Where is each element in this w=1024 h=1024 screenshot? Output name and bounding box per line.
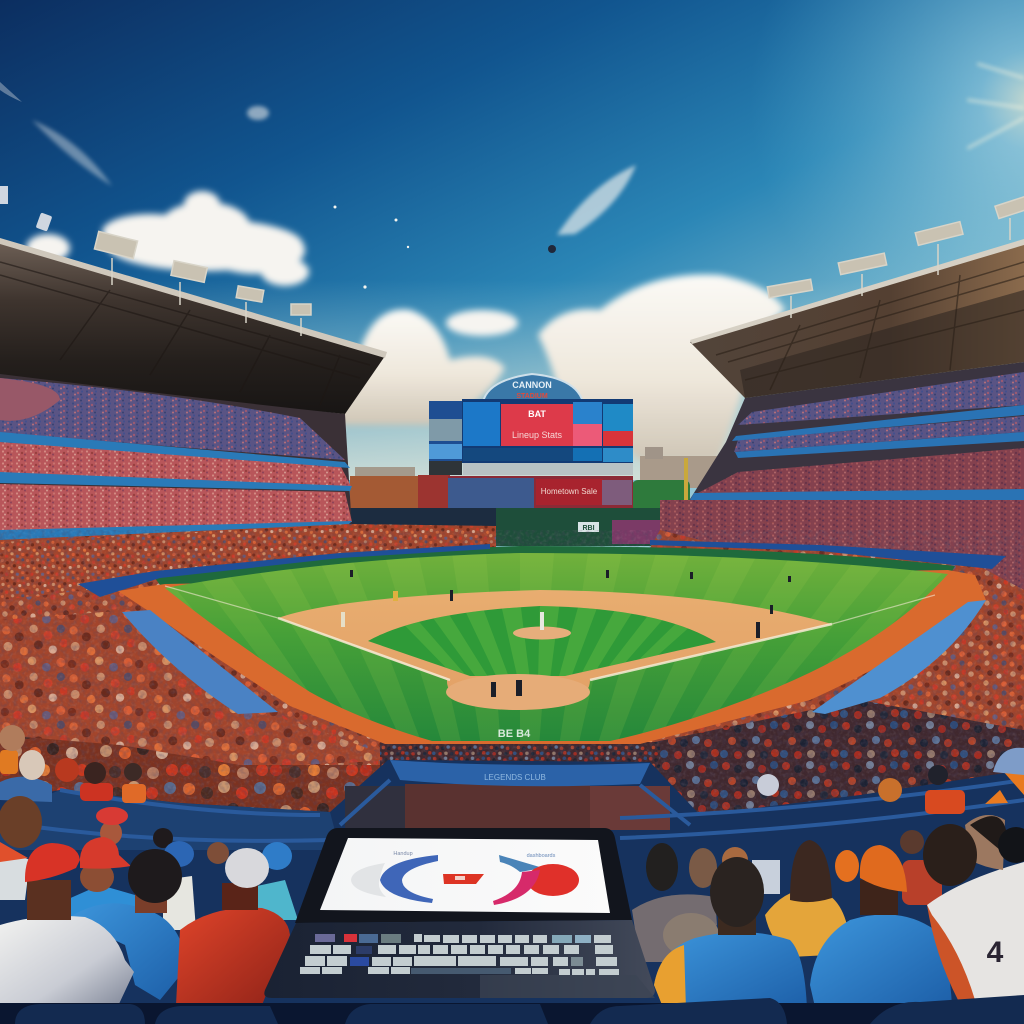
skyline buildings [355,447,718,512]
chart label left: Handup [393,851,413,857]
infield grass [368,606,716,676]
center seating section: LEGENDS CLUB [484,773,546,782]
left seating tiers [0,372,352,540]
fan in white jersey: 4 [987,936,1004,969]
foul ground [155,546,955,592]
stadium light towers [94,196,1024,336]
fan in red shirt with white cap [176,848,290,1005]
seat back [663,913,719,957]
field text: BE B4 [498,728,531,740]
sky background [0,0,1024,560]
crowd bowl [0,505,1024,860]
grass [165,553,948,741]
keyboard keys [300,934,619,975]
fan in blue shirt with orange cap [810,845,952,1007]
field [78,540,1006,744]
background fan red cap [96,807,128,845]
right roof [690,240,1024,398]
outfield wall and banners [350,475,686,546]
tablet screen [320,838,610,913]
baselines [278,618,832,680]
scoreboard crest sign: STADIUM [516,393,548,400]
fan in yellow shirt [765,840,847,957]
outfield wall [78,540,1006,597]
scoreboard [429,374,633,475]
players [341,570,791,697]
main board: BAT [528,409,546,419]
blue cap fan [153,828,196,930]
background fans [689,830,942,905]
outfield wall and banners: Hometown Sale [541,487,598,496]
right front fans [632,815,1024,1010]
right upper stand [660,239,1024,550]
tablet keyboard base [264,920,655,998]
birds and balls in the sky [0,186,556,289]
sun rays [968,64,1024,148]
pitcher mound [513,626,571,640]
strip below board [463,463,633,475]
left front fans [0,796,298,1006]
chart label right: dashboards [527,853,556,859]
background fan [207,842,229,864]
tablet device [264,828,655,998]
fan in striped shirt [0,796,42,900]
left mid crowd fans [0,725,146,803]
fan in blue and orange shirt [654,857,807,1010]
home plate area [446,674,590,710]
right seating tiers [660,362,1024,545]
blue side tarps [122,610,278,714]
tablet trackpad [480,975,655,998]
fan in white shirt with red cap [0,843,134,1006]
fan in grey shirt [632,843,717,962]
front seat row [0,995,1024,1024]
clouds [0,82,785,460]
fan in white jersey [923,815,1024,1000]
left video column [429,401,462,475]
fan with blue cap and teal shirt [257,842,298,920]
right mid crowd fans [757,748,1024,814]
main board [462,399,633,463]
mowing stripes [166,560,942,741]
infield dirt [278,590,832,710]
donut chart [351,851,579,905]
fan in blue shirt [68,849,182,1000]
left upper stand [0,238,387,540]
scoreboard crest sign [483,374,583,402]
outfield wall and banners: RBI [582,525,595,532]
fan in blue shirt with red cap [66,837,135,925]
tablet screen bezel [295,828,632,923]
center seating section [0,760,1024,1024]
left roof [0,240,385,414]
main board: Lineup Stats [512,430,563,440]
scoreboard crest sign: CANNON [512,380,552,390]
warning track [118,570,986,744]
